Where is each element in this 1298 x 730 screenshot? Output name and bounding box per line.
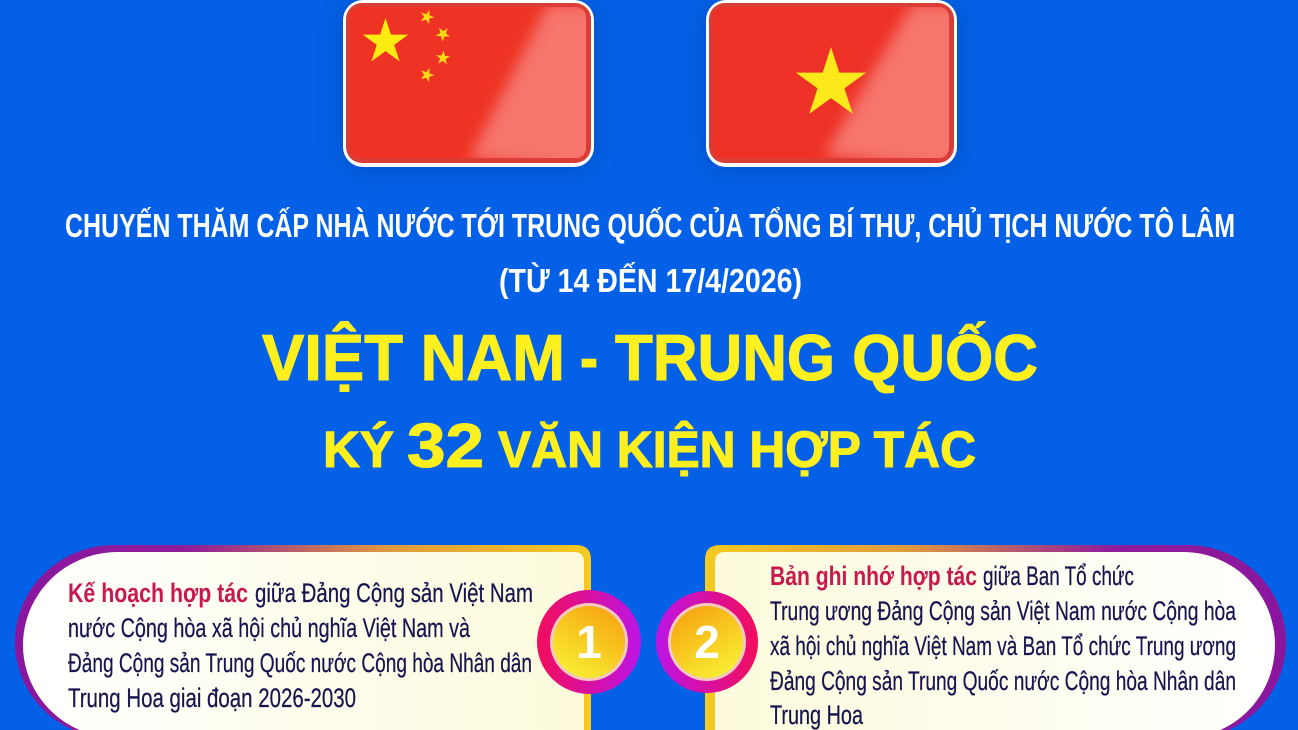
text: document 1 description: giữa Đảng Cộng sản Việt Nam xyxy=(255,578,533,608)
badge: number 1: 1 xyxy=(576,616,602,668)
text: document 2 description: giữa Ban Tổ chức xyxy=(983,561,1134,591)
panel: document 1 xyxy=(15,545,591,730)
subtitle: 32 cooperation documents: 32 xyxy=(407,412,484,481)
text: document 2 description: Bản ghi nhớ hợp tác xyxy=(770,561,977,591)
subtitle: 32 cooperation documents: VĂN KIỆN HỢP TÁC xyxy=(498,420,976,478)
text: document 1 description: nước Cộng hòa xã hội chủ nghĩa Việt Nam và xyxy=(68,613,471,643)
badge: number 2: 2 xyxy=(694,616,720,668)
title: Việt Nam - Trung Quốc: - xyxy=(580,321,598,394)
title: Việt Nam - Trung Quốc: TRUNG QUỐC xyxy=(615,321,1038,394)
flag: China xyxy=(343,0,610,175)
subtitle: 32 cooperation documents: KÝ xyxy=(323,420,394,478)
text: document 2 description: Trung Hoa xyxy=(770,700,864,730)
flag: Vietnam xyxy=(706,0,975,175)
title: Việt Nam - Trung Quốc: VIỆT NAM xyxy=(262,321,565,394)
text: document 1 description xyxy=(68,578,533,713)
text: document 2 description xyxy=(770,561,1237,730)
panel: document 2 xyxy=(705,545,1286,730)
text: document 1 description: Đảng Cộng sản Trung Quốc nước Cộng hòa Nhân dân xyxy=(68,648,532,678)
heading: visit dates: (TỪ 14 ĐẾN 17/4/2026) xyxy=(499,262,802,299)
text: document 1 description: Kế hoạch hợp tác xyxy=(68,578,248,608)
badge: number 2 xyxy=(656,591,758,693)
badge: number 1 xyxy=(537,590,641,694)
text: document 1 description: Trung Hoa giai đoạn 2026-2030 xyxy=(68,683,356,713)
title: Việt Nam - Trung Quốc xyxy=(262,321,1038,394)
subtitle: 32 cooperation documents xyxy=(323,412,976,481)
